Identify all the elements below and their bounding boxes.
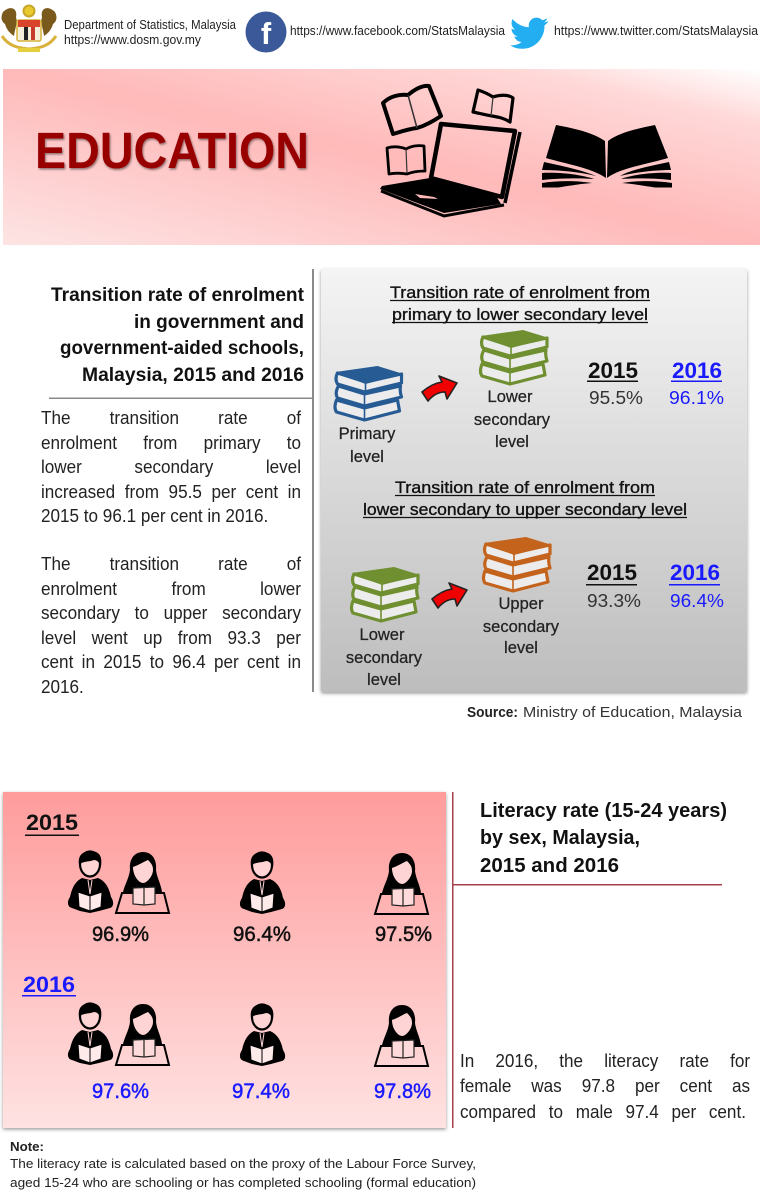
icon: facebook [246, 12, 286, 52]
icon: laptop with books [380, 86, 520, 216]
title: EDUCATION [35, 122, 309, 179]
text block: primary to lower secondary summary: enrolment from primary to [41, 433, 301, 453]
icon: female 2016 [375, 1005, 428, 1066]
section heading: transition rate: Malaysia, 2015 and 2016 [82, 365, 304, 386]
values 2015: 96.4% [233, 923, 291, 946]
heading: primary to lower secondary: primary to lower secondary level [392, 305, 648, 324]
note: aged 15-24 who are schooling or has completed schooling (formal education) [10, 1176, 476, 1190]
values 2016: 97.6% [92, 1080, 149, 1103]
text block: lower to upper secondary summary: 2016. [41, 677, 84, 697]
icons: both sexes 2016 [68, 1003, 169, 1065]
icon: orange books [484, 537, 552, 591]
text block: lower to upper secondary summary: level went up from 93.3 per [41, 628, 301, 648]
text block: literacy summary: female was 97.8 per cent as [460, 1076, 750, 1096]
label: lower secondary level: secondary [474, 411, 551, 429]
values 2016: 97.8% [374, 1080, 431, 1103]
icon: facebook: f [261, 16, 272, 51]
note: Note: [10, 1140, 44, 1154]
icon: male 2015 [240, 852, 285, 914]
text block: primary to lower secondary summary [41, 408, 302, 526]
banner [3, 69, 760, 245]
text block: literacy summary [460, 1051, 750, 1122]
icon: green books [352, 567, 420, 621]
label: upper secondary level: level [504, 639, 538, 657]
icon: twitter bird [510, 18, 548, 49]
values 2015 [92, 923, 432, 946]
text block: literacy summary: compared to male 97.4 per cent. [460, 1102, 746, 1122]
values: 2016 [669, 560, 724, 611]
label: primary level [339, 425, 396, 466]
heading: literacy rate: by sex, Malaysia, [480, 827, 640, 849]
label: lower secondary level: Lower [360, 626, 405, 644]
text block: lower to upper secondary summary: The transition rate of [41, 554, 301, 574]
section heading: transition rate: government-aided schools, [60, 338, 304, 359]
heading: literacy rate: 2015 and 2016 [480, 855, 619, 877]
icon: male 2016 [240, 1004, 285, 1066]
section heading: transition rate: in government and [134, 312, 304, 333]
label: lower secondary level [474, 388, 551, 451]
facebook link: https://www.facebook.com/StatsMalaysia [290, 23, 506, 38]
icon: blue books [335, 366, 404, 420]
heading: lower to upper secondary: lower secondary to upper secondary level [363, 500, 687, 519]
source: Ministry of Education, Malaysia [523, 704, 743, 721]
year heading 2016: 2016 [23, 972, 75, 997]
section heading: transition rate: Transition rate of enrolment [51, 285, 305, 306]
icon: green books [480, 330, 549, 384]
values: 2015: 2015 [588, 358, 638, 383]
label: primary level: level [350, 448, 384, 466]
values: 2016: 96.1% [669, 388, 724, 408]
header: department name and website [64, 17, 237, 47]
header: department name and website: https://www.dosm.gov.my [64, 32, 201, 47]
values 2015: 96.9% [92, 923, 149, 946]
values: 2016: 2016 [670, 560, 720, 585]
arrow [432, 583, 467, 608]
text block: lower to upper secondary summary [41, 554, 302, 697]
text block: lower to upper secondary summary: cent in 2015 to 96.4 per cent in [41, 652, 301, 672]
icon: open book [542, 125, 672, 188]
label: lower secondary level: secondary [346, 649, 423, 667]
arrow [422, 376, 457, 401]
heading: lower to upper secondary: Transition rate of enrolment from [395, 478, 655, 497]
header: department crest [2, 6, 56, 52]
values: 2016: 2016 [672, 358, 722, 383]
header: department name and website: Department of Statistics, Malaysia [64, 17, 237, 32]
heading: primary to lower secondary [390, 283, 650, 324]
label: lower secondary level: level [367, 671, 401, 689]
values: 2016 [669, 358, 724, 408]
heading: primary to lower secondary: Transition rate of enrolment from [390, 283, 650, 302]
values: 2015: 2015 [587, 560, 637, 585]
label: upper secondary level: secondary [483, 618, 560, 636]
heading: literacy rate: Literacy rate (15-24 years) [480, 800, 727, 822]
label: upper secondary level [483, 595, 560, 657]
heading: literacy rate [480, 800, 727, 877]
text block: literacy summary: In 2016, the literacy rate for [460, 1051, 750, 1071]
values 2016: 97.4% [232, 1080, 290, 1103]
values: 2015 [587, 358, 643, 408]
heading: lower to upper secondary [363, 478, 687, 519]
values: 2015 [586, 560, 641, 611]
panel: transition rates [321, 269, 747, 692]
label: lower secondary level: level [495, 433, 529, 451]
section heading: transition rate [51, 285, 305, 386]
text block: lower to upper secondary summary: enrolment from lower [41, 579, 301, 599]
text block: primary to lower secondary summary: lower secondary level [41, 457, 301, 477]
panel: literacy rates [3, 792, 446, 1128]
text block: primary to lower secondary summary: The transition rate of [41, 408, 301, 428]
label: primary level: Primary [339, 425, 396, 443]
text block: lower to upper secondary summary: secondary to upper secondary [41, 603, 301, 623]
values: 2015: 93.3% [587, 591, 641, 611]
label: upper secondary level: Upper [499, 595, 544, 613]
icon: female 2015 [375, 853, 428, 914]
label: lower secondary level: Lower [488, 388, 533, 406]
values: 2015: 95.5% [589, 388, 643, 408]
year heading 2015: 2015 [26, 810, 78, 835]
text block: primary to lower secondary summary: increased from 95.5 per cent in [41, 482, 301, 502]
note [10, 1140, 476, 1190]
values: 2016: 96.4% [670, 591, 724, 611]
text block: primary to lower secondary summary: 2015 to 96.1 per cent in 2016. [41, 506, 268, 526]
icons: both sexes 2015 [68, 851, 169, 913]
note: The literacy rate is calculated based on the proxy of the Labour Force Survey, [10, 1157, 476, 1171]
values 2016 [92, 1080, 431, 1103]
label: lower secondary level [346, 626, 423, 689]
values 2015: 97.5% [375, 923, 432, 946]
source: Source: [467, 704, 518, 721]
